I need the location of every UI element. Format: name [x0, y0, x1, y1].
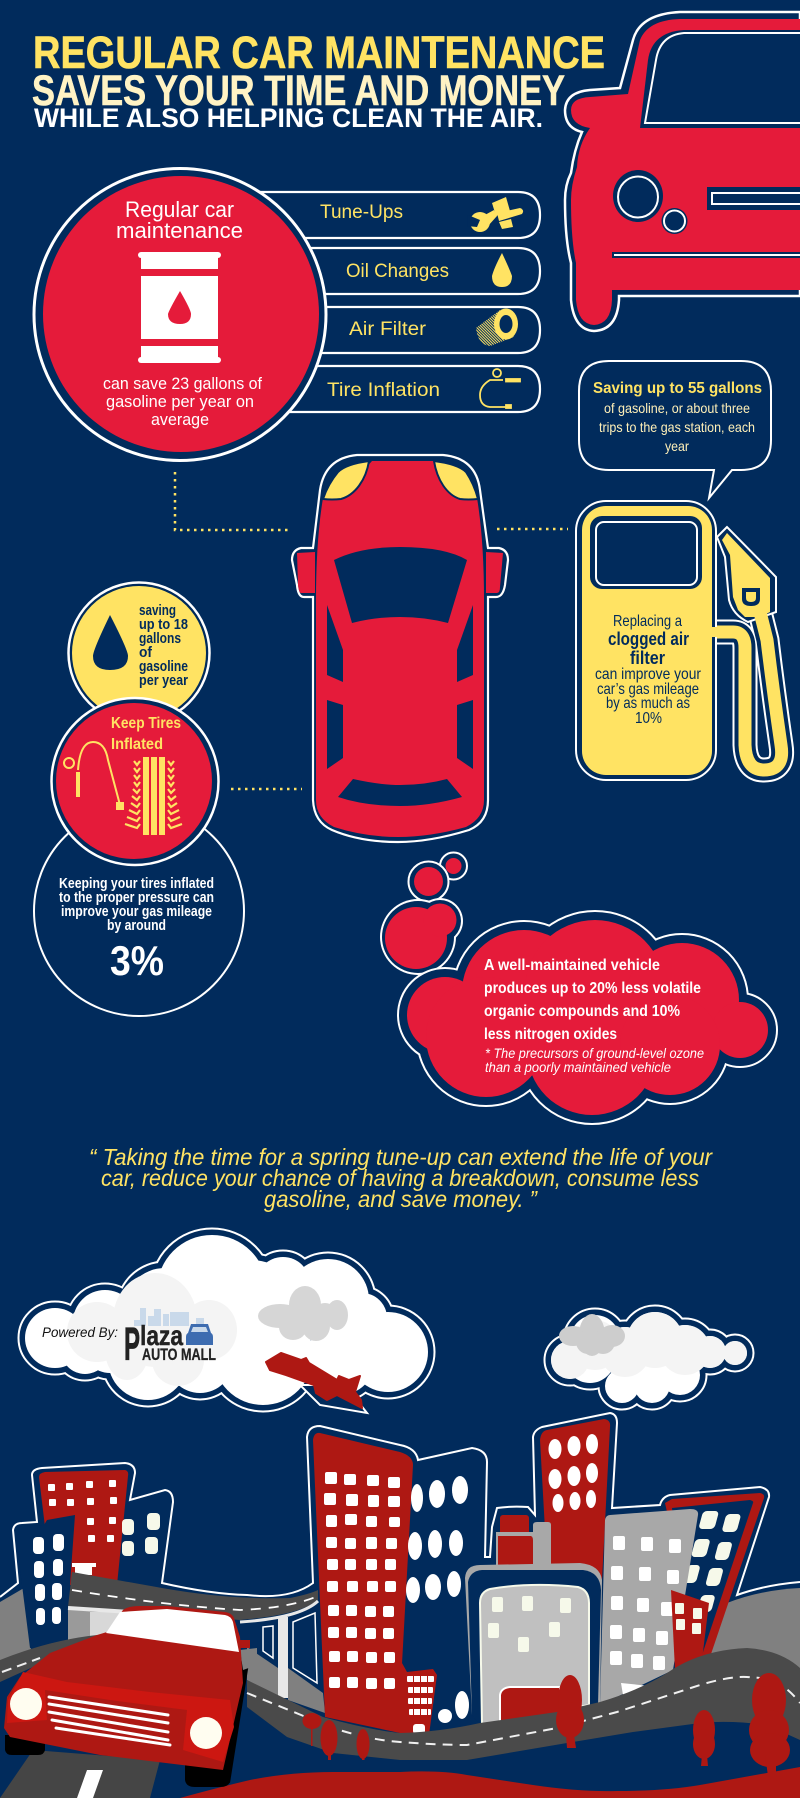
quote: “ Taking the time for a spring tune-up can extend the life of your: [89, 1144, 713, 1170]
headlights: [323, 461, 478, 500]
title: [32, 27, 605, 133]
speech bubble: saving up to 55 gallons: Saving up to 55 gallons: [593, 380, 762, 397]
speech bubble: saving up to 55 gallons: year: [665, 438, 689, 454]
red tower: left: [39, 1470, 128, 1585]
fuel pump: [576, 501, 782, 780]
white-outlined circle: 3%: 3%: [110, 937, 164, 984]
navy building oval windows: [406, 1476, 469, 1723]
pill: air filter: [230, 307, 540, 353]
panel: regular car maintenance circle: Regular car: [125, 197, 234, 222]
title: WHILE ALSO HELPING CLEAN THE AIR.: [34, 103, 543, 133]
small cloud: [551, 1312, 747, 1403]
navy tower: [15, 1515, 75, 1648]
yellow circle: saving up to 18 gallons: saving: [139, 602, 176, 619]
icon: tire tread: [125, 757, 182, 835]
icon: fuel drop: [93, 615, 128, 670]
panel: regular car maintenance circle: [34, 168, 326, 460]
lower road: [247, 1648, 800, 1760]
pale cloud behind logo: [67, 1273, 237, 1386]
title: SAVES YOUR TIME AND MONEY: [32, 67, 565, 115]
yellow circle: saving up to 18 gallons: of: [139, 644, 153, 661]
thought cloud: well-maintained vehicle: A well-maintained vehicle: [484, 957, 660, 974]
pill: air filter: Air Filter: [349, 319, 427, 340]
logo: plaza auto mall: laza: [140, 1320, 183, 1351]
center car top view: [292, 455, 508, 842]
red circle: keep tires inflated: Inflated: [111, 736, 163, 753]
fuel pump: Replacing a: [613, 613, 682, 630]
small red building front: [671, 1590, 709, 1670]
connector: dotted lines: [175, 472, 568, 789]
car windows: [327, 547, 473, 806]
red car: [4, 1606, 257, 1787]
pill: oil changes: Oil Changes: [346, 261, 449, 282]
fuel pump: 10%: [635, 710, 662, 727]
trees: [302, 1673, 790, 1776]
thought bubbles: [380, 852, 467, 975]
navy tower windows: [122, 1513, 160, 1556]
yellow circle: saving up to 18 gallons: up to 18: [139, 616, 188, 633]
white-outlined circle: 3%: [34, 806, 244, 1016]
panel: regular car maintenance circle: maintenance: [116, 218, 243, 243]
top car front illustration: [565, 12, 800, 331]
quote: car, reduce your chance of having a breakdown, consume less: [101, 1165, 699, 1191]
small red building: [400, 1663, 437, 1735]
white-outlined circle: 3%: Keeping your tires inflated: [59, 875, 214, 892]
panel: regular car maintenance circle: gasoline per year on: [106, 392, 254, 411]
red tower: center with oval windows: [540, 1419, 610, 1580]
quote: [89, 1144, 713, 1212]
fuel pump: filter: [630, 648, 665, 668]
yellow circle: saving up to 18 gallons: [68, 582, 210, 724]
maintenance list pills: [230, 192, 540, 412]
thought cloud: well-maintained vehicle: produces up to 20% less volatile: [484, 980, 701, 997]
thought cloud: well-maintained vehicle: * The precursors of ground-level ozone: [485, 1046, 704, 1061]
panel: regular car maintenance circle: average: [151, 410, 209, 429]
panel: regular car maintenance circle: can save 23 gallons of: [103, 374, 262, 393]
fuel pump: car’s gas mileage: [597, 681, 699, 698]
slanted navy building with red edge: [665, 1493, 764, 1660]
skyline outline: [0, 1413, 800, 1597]
white-outlined circle: 3%: improve your gas mileage: [61, 903, 212, 920]
red tower: tall center-left: [313, 1433, 413, 1733]
car tires: [5, 1640, 257, 1787]
panel: tires inflated savings: [34, 582, 244, 1016]
red circle: keep tires inflated: Keep Tires: [111, 715, 181, 732]
red circle: keep tires inflated: [52, 698, 218, 865]
grey cloud: [258, 1286, 348, 1341]
speech bubble: saving up to 55 gallons: of gasoline, or about three: [604, 400, 750, 416]
fuel pump: clogged air: [608, 629, 689, 649]
thought cloud: well-maintained vehicle: than a poorly maintained vehicle: [485, 1060, 671, 1075]
speech bubble: saving up to 55 gallons: [579, 361, 771, 498]
overpass road: [68, 1572, 325, 1713]
grey building: [600, 1509, 698, 1705]
airplane: [266, 1353, 367, 1413]
quote: gasoline, and save money. ”: [264, 1186, 538, 1212]
yellow circle: saving up to 18 gallons: gasoline: [139, 658, 188, 675]
fuel pump: can improve your: [595, 666, 702, 683]
logo: plaza auto mall: P: [124, 1318, 140, 1370]
pill: tire inflation: [230, 366, 540, 412]
fuel pump: by as much as: [606, 695, 690, 712]
white-outlined circle: 3%: by around: [107, 917, 166, 934]
large cloud with logo: [25, 1235, 428, 1413]
thought cloud: well-maintained vehicle: less nitrogen oxides: [484, 1026, 617, 1043]
logo: plaza auto mall: [42, 1308, 216, 1370]
icon: oil barrel: [138, 252, 221, 363]
thought cloud: well-maintained vehicle: [380, 852, 768, 1115]
speech bubble: saving up to 55 gallons: trips to the gas station, each: [599, 419, 755, 435]
logo: plaza auto mall: AUTO MALL: [142, 1345, 216, 1364]
icon: air hose gauge: [64, 742, 123, 809]
city skyline: [0, 1413, 800, 1798]
pill: tune-ups: [230, 192, 540, 238]
pill: oil changes: [230, 248, 540, 294]
road in front of car: [0, 1635, 160, 1798]
yellow circle: saving up to 18 gallons: gallons: [139, 630, 181, 647]
logo: plaza auto mall: Powered By:: [42, 1324, 118, 1340]
pill: tire inflation: Tire Inflation: [327, 380, 440, 401]
yellow circle: saving up to 18 gallons: per year: [139, 672, 188, 689]
thought cloud: well-maintained vehicle: organic compounds and 10%: [484, 1003, 680, 1020]
pill: tune-ups: Tune-Ups: [320, 202, 403, 223]
grey hills: [0, 1588, 800, 1670]
title: REGULAR CAR MAINTENANCE: [33, 27, 605, 78]
central building: [465, 1515, 602, 1725]
hose and nozzle: [705, 527, 782, 770]
bottom red ground: [180, 1767, 800, 1798]
white-outlined circle: 3%: to the proper pressure can: [59, 889, 214, 906]
